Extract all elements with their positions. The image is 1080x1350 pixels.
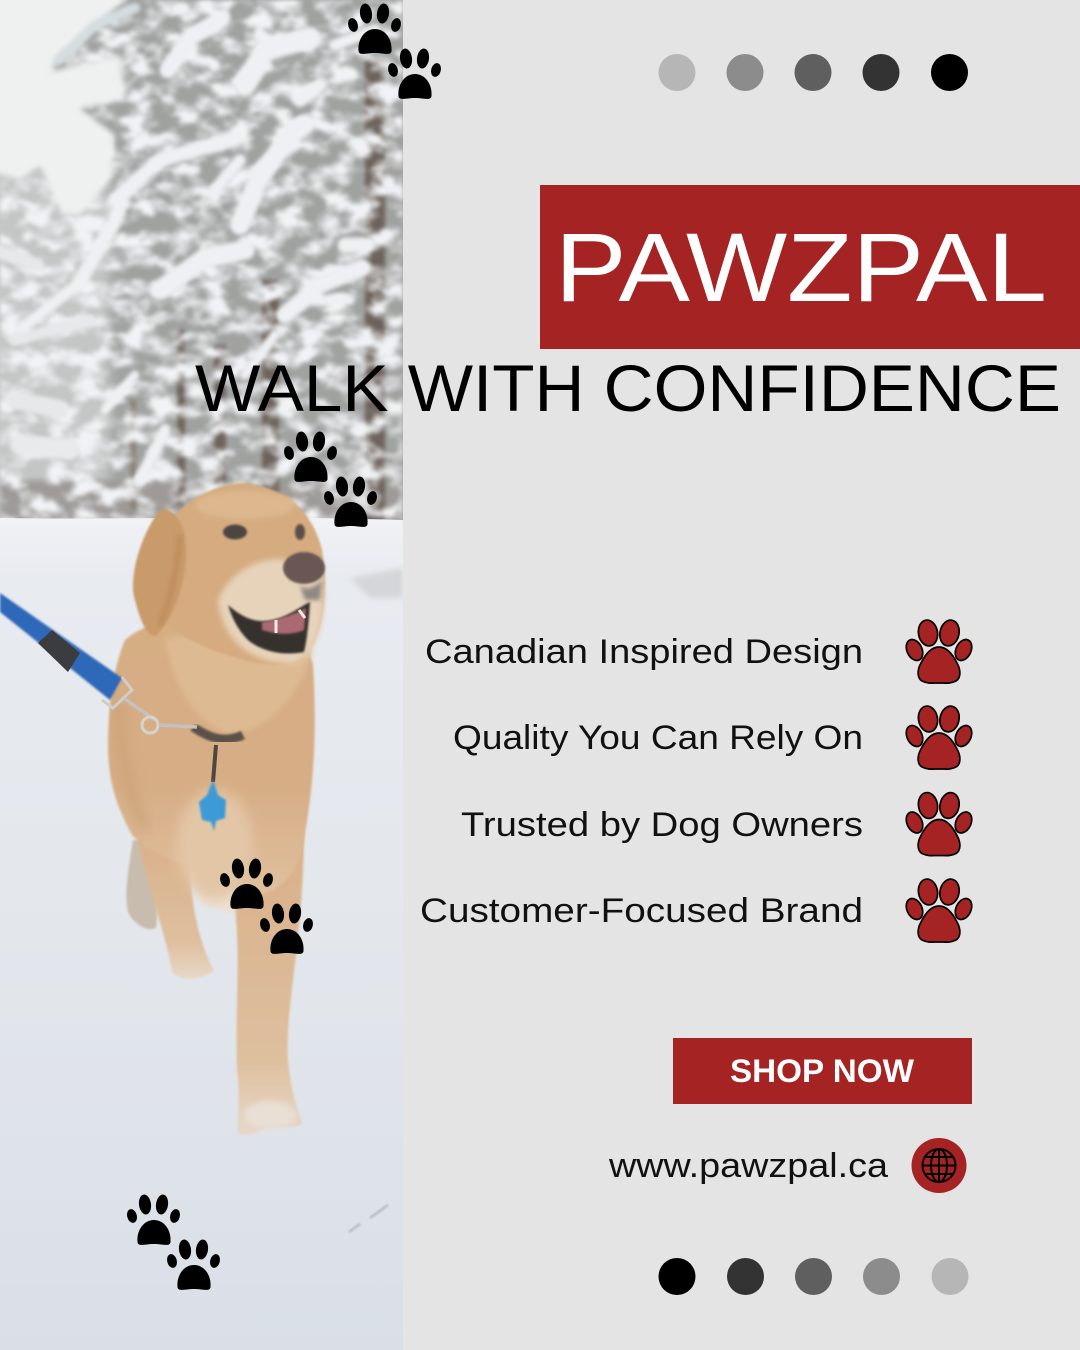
teeth [276,610,305,633]
brand name: PAWZPAL [555,213,1047,322]
blue leaf tag [199,780,226,831]
ear [133,509,186,636]
snowy forest backdrop [0,0,403,540]
snowy ground [0,518,403,1350]
feature 2 [453,704,975,769]
shop now button [673,1038,972,1104]
ear fold shadow [160,535,180,625]
mottled snow texture [0,0,403,530]
feature list [420,618,975,942]
eyes [223,524,247,540]
paw highlight [244,1101,296,1129]
tag cord [213,745,216,782]
tagline: WALK WITH CONFIDENCE [195,351,1061,425]
body side shadow [118,700,145,830]
paw prints: above dog [283,431,378,527]
feature 3: Trusted by Dog Owners [461,806,863,844]
website url: www.pawzpal.ca [608,1147,888,1185]
forehead highlight [195,491,295,519]
distant pale trees [0,160,110,540]
twigs in snow [349,1205,388,1232]
feature 1: Canadian Inspired Design [425,633,863,671]
photo: golden retriever walking on a leash in a snowy forest [0,0,403,1350]
mouth [228,602,310,654]
collar [193,727,243,739]
bottom dot row [658,1258,968,1295]
dog [108,483,325,1135]
forest floor shadow [0,478,398,518]
feature 1 [425,618,975,683]
feature 2: Quality You Can Rely On [453,719,863,757]
head [166,482,326,665]
brand banner [540,185,1080,349]
leash ring [142,717,158,733]
tongue [262,608,306,634]
chest light fur [177,790,253,900]
muzzle pale [218,559,324,664]
leash clip [122,697,197,727]
tree trunks [130,60,385,530]
paw prints: bottom [126,1194,221,1290]
chest ruff [165,634,312,735]
paw prints: at dog leg [219,858,314,954]
snow at tree base [350,568,403,598]
rear leg [126,840,157,929]
feature 4 [420,877,975,942]
tree mass [50,0,403,520]
body and chest [108,616,315,896]
icon: globe [912,1138,966,1193]
main front leg [234,830,304,1135]
leash ring buckle [102,677,132,708]
shop now button: SHOP NOW [730,1053,915,1089]
white belly fur [202,890,236,914]
nose [283,552,325,584]
pale sky [0,0,135,215]
feature 3 [461,791,975,856]
paw prints: top [347,3,442,99]
blue leash [0,593,132,708]
feature 4: Customer-Focused Brand [420,892,863,930]
leash black band [38,630,80,672]
top dot row [658,54,968,91]
muzzle dark under nose [300,580,322,600]
second front leg [136,830,214,979]
snow-laden branches [0,8,375,480]
